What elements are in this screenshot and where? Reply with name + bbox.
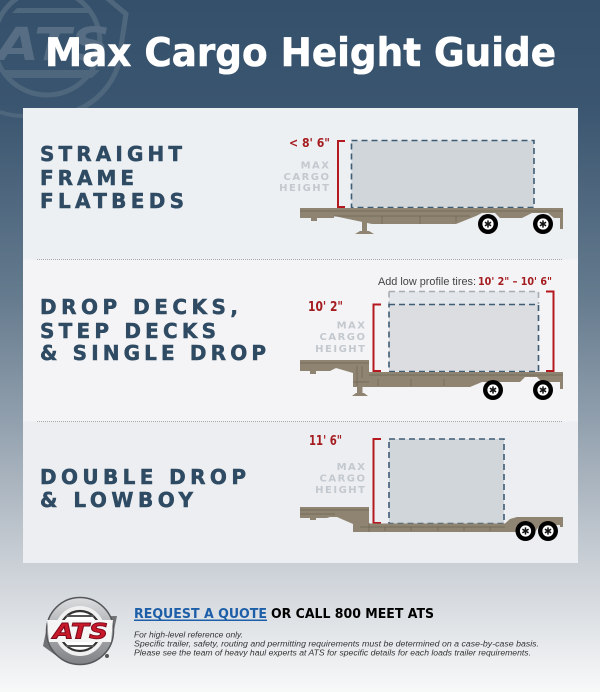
cargo box: [389, 439, 504, 524]
call to action: REQUEST A QUOTE: [134, 607, 267, 622]
panel: guide sections: [23, 108, 578, 563]
max cargo height label: CARGO: [284, 172, 330, 183]
title: Max Cargo Height Guide: [45, 31, 556, 76]
right height bracket: [546, 292, 554, 371]
low profile tires note: [378, 275, 552, 288]
max cargo height label: CARGO: [320, 332, 366, 343]
heading: double drop and lowboy: & LOWBOY: [40, 488, 194, 512]
max cargo height label: HEIGHT: [315, 344, 366, 355]
max cargo height label: HEIGHT: [279, 183, 330, 194]
low profile tires note: Add low profile tires:: [378, 276, 476, 288]
call to action: [134, 607, 434, 622]
max cargo height label: HEIGHT: [315, 485, 366, 496]
call to action: OR CALL 800 MEET ATS: [271, 607, 434, 622]
heading: drop decks: STEP DECKS: [40, 319, 216, 343]
heading: straight frame flatbeds: STRAIGHT: [40, 142, 182, 166]
watermark logo: [0, 0, 126, 118]
heading: straight frame flatbeds: FLATBEDS: [40, 189, 184, 213]
footer logo: [43, 598, 117, 664]
section: drop decks: [40, 275, 563, 400]
max cargo height label: MAX: [337, 320, 366, 332]
max cargo height label: MAX: [337, 462, 366, 473]
section: double drop and lowboy: [40, 433, 563, 541]
max cargo height label: MAX: [301, 160, 330, 172]
height label: 10' 2": [308, 299, 343, 315]
low profile cargo box: [389, 292, 538, 304]
disclaimer: For high-level reference only.: [134, 630, 243, 640]
max cargo height label: [315, 462, 366, 496]
heading: drop decks: & SINGLE DROP: [40, 341, 266, 365]
height bracket: [338, 141, 345, 207]
footer logo: ATS: [50, 620, 108, 644]
low profile tires note: 10' 2" – 10' 6": [478, 275, 552, 288]
disclaimer: Please see the team of heavy haul experts at ATS for specific details for each loads trailer requirements.: [134, 648, 531, 658]
height bracket: [374, 439, 381, 523]
trailer: flatbed: [300, 208, 563, 234]
cargo box: [389, 304, 538, 372]
trailer: lowboy: [300, 507, 563, 541]
height label: 11' 6": [309, 433, 342, 449]
heading: drop decks: DROP DECKS,: [40, 295, 238, 319]
section: straight frame flatbeds: [40, 136, 563, 234]
max cargo height label: CARGO: [320, 474, 366, 484]
disclaimer: Specific trailer, safety, routing and permitting requirements must be determined on a case-by-case basis.: [134, 638, 539, 648]
left height bracket: [374, 304, 381, 371]
heading: drop decks: [40, 295, 266, 365]
heading: double drop and lowboy: DOUBLE DROP: [40, 465, 246, 489]
heading: straight frame flatbeds: [40, 142, 184, 213]
trailer: drop deck: [300, 360, 563, 400]
height label: < 8' 6": [289, 136, 330, 150]
max cargo height label: [315, 320, 366, 355]
heading: straight frame flatbeds: FRAME: [40, 166, 134, 190]
max cargo height label: [279, 160, 330, 194]
heading: double drop and lowboy: [40, 465, 246, 512]
disclaimer: [134, 630, 539, 658]
cargo box: [352, 140, 534, 208]
